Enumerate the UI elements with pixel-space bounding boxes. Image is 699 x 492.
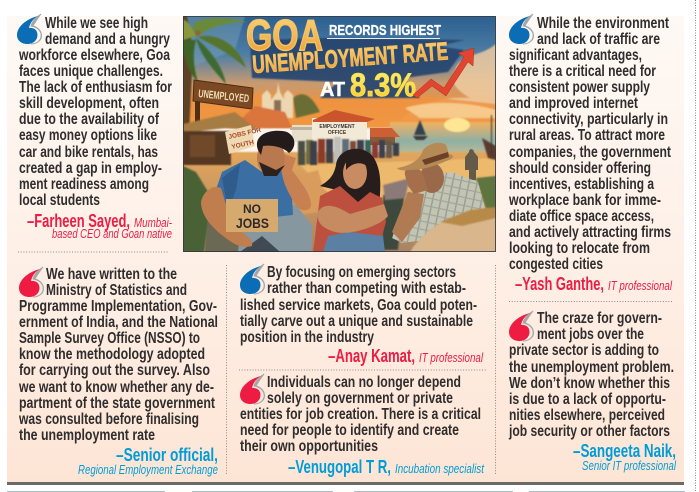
attribution: –Yash Ganthe, — [515, 274, 604, 294]
text block: should consider offering — [509, 160, 651, 177]
employment office building: OFFICE — [328, 130, 347, 136]
attribution: –Venugopal T R, — [288, 457, 391, 477]
title: 8.3%: 8.3% — [350, 67, 416, 103]
attribution: IT professional — [608, 279, 673, 293]
text block: By focusing on emerging sectors — [267, 264, 456, 281]
panel base rule — [7, 482, 684, 485]
text block: skill development, often — [19, 95, 159, 112]
arrow: rising red — [413, 48, 474, 98]
text block — [508, 15, 671, 273]
sign: Unemployed: UNEMPLOYED — [198, 88, 250, 105]
quote 4: Venugopal T R — [240, 374, 484, 477]
text block: rather than competing with estab- — [267, 280, 466, 297]
text block: demand and a hungry — [45, 31, 170, 48]
title: GOA: GOA — [246, 11, 323, 60]
sign: Jobs for Youth: YOUTH — [231, 139, 255, 151]
text block: easy money options like — [19, 127, 157, 144]
icon: blue quote mark — [17, 14, 42, 44]
text block: significant advantages, — [509, 47, 642, 64]
text block — [18, 15, 172, 209]
text block: know the methodology adopted — [19, 346, 205, 363]
sand mound — [410, 207, 496, 252]
text block: We have written to the — [46, 266, 177, 283]
text block: private sector is adding to — [509, 342, 659, 359]
quote 6: Sangeeta Naik — [508, 310, 677, 473]
text block: The craze for govern- — [537, 310, 662, 327]
job seekers queue — [298, 137, 399, 165]
man in blue shirt — [201, 131, 312, 252]
sign: Jobs for Youth: JOBS FOR — [228, 127, 262, 141]
text block: ment readiness among — [19, 176, 149, 193]
sailboat and boat — [413, 115, 496, 160]
sign: Unemployed — [192, 79, 254, 122]
employment office building — [290, 110, 400, 145]
plants left — [183, 166, 210, 252]
text block: the unemployment rate — [19, 427, 155, 444]
text block: there is a critical need for — [509, 63, 656, 80]
church — [240, 82, 320, 128]
illustration background: sky and beach — [183, 16, 496, 252]
text block: faces unique challenges. — [19, 63, 163, 80]
text block: car and bike rentals, has — [19, 144, 158, 161]
hut — [183, 112, 258, 165]
text block: lished service markets, Goa could poten- — [240, 297, 477, 314]
text block: tially carve out a unique and sustainable — [240, 313, 473, 330]
text block: Programme Implementation, Gov- — [19, 298, 217, 315]
underline — [327, 38, 440, 39]
attribution: –Senior official, — [116, 445, 218, 465]
text block: local students — [19, 192, 100, 209]
sign: Jobs for Youth — [225, 125, 262, 154]
sign: No Jobs — [226, 199, 278, 232]
icon: red quote mark — [240, 374, 265, 404]
attribution: based CEO and Goan native — [52, 227, 172, 241]
text block: for carrying out the survey. Also — [19, 362, 210, 379]
text block: The lack of enthusiasm for — [19, 79, 172, 96]
text block — [18, 266, 218, 444]
text block: created a gap in employ- — [19, 160, 162, 177]
text block: incentives, establishing a — [509, 176, 654, 193]
text block: Sample Survey Office (NSSO) to — [19, 330, 200, 347]
icon: red quote mark — [19, 267, 44, 297]
quote 3: Anay Kamat — [240, 264, 484, 366]
text block — [240, 264, 477, 346]
sign: No Jobs: NO — [243, 202, 261, 216]
text block — [240, 374, 481, 455]
right plants — [476, 176, 496, 212]
icon: blue quote mark — [240, 264, 265, 294]
text block: workplace bank for imme- — [508, 192, 661, 209]
text block: Ministry of Statistics and — [46, 282, 187, 299]
text block: ernment of India, and the National — [19, 314, 218, 331]
title: Records Highest: RECORDS HIGHEST — [329, 22, 441, 39]
icon: red quote mark — [509, 311, 534, 341]
title brush band — [250, 38, 465, 98]
text block: and improved internet — [509, 95, 638, 112]
woman with crossed arms — [313, 149, 388, 252]
text block: entities for job creation. There is a critical — [240, 406, 481, 423]
old man with hat — [392, 143, 485, 243]
text block: due to the availability of — [19, 111, 160, 128]
attribution — [27, 211, 172, 241]
attribution: IT professional — [419, 351, 484, 365]
icon: blue quote mark — [509, 14, 534, 44]
quote 1: Farheen Sayed — [17, 14, 172, 241]
palm tree — [183, 16, 248, 135]
employment office building: EMPLOYMENT — [319, 124, 355, 130]
text block: ment jobs over the — [537, 326, 644, 343]
text block: was consulted before finalising — [18, 411, 199, 428]
text block: While we see high — [45, 15, 148, 32]
text block: we want to know whether any de- — [18, 379, 214, 396]
attribution: Mumbai- — [134, 216, 172, 230]
text block: consistent power supply — [509, 79, 650, 96]
distant standing man — [465, 149, 478, 180]
attribution: Incubation specialist — [395, 462, 484, 476]
text block: looking to relocate from — [509, 240, 650, 257]
illustration border — [184, 16, 496, 252]
text block: While the environment — [537, 15, 669, 32]
quote 5: Yash Ganthe — [508, 14, 673, 294]
text block: congested cities — [509, 256, 603, 273]
strips of next section — [7, 491, 685, 492]
text block: position in the industry — [240, 329, 374, 346]
sign: No Jobs: JOBS — [236, 215, 269, 231]
text block: partment of the state government — [19, 395, 215, 412]
text block: Individuals can no longer depend — [267, 374, 461, 391]
attribution: –Anay Kamat, — [328, 346, 415, 366]
attribution: –Farheen Sayed, — [27, 211, 130, 231]
title: AT: AT — [320, 79, 345, 101]
attribution — [78, 445, 218, 477]
quote 2: Senior official — [18, 266, 218, 477]
page border: dotted rule — [694, 0, 696, 492]
attribution: Regional Employment Exchange — [78, 463, 218, 477]
text block: their own opportunities — [240, 438, 378, 455]
text block: workforce elsewhere, Goa — [18, 47, 170, 64]
text block: need for people to identify and create — [240, 422, 459, 439]
attribution — [573, 441, 677, 473]
illustration: Goa unemployment poster — [183, 11, 496, 252]
title: Unemployment Rate: UNEMPLOYMENT RATE — [251, 37, 449, 79]
text block — [508, 310, 674, 440]
text block: diate office space access, — [509, 208, 654, 225]
text block: and lack of traffic are — [537, 31, 660, 48]
text block: solely on government or private — [267, 390, 453, 407]
